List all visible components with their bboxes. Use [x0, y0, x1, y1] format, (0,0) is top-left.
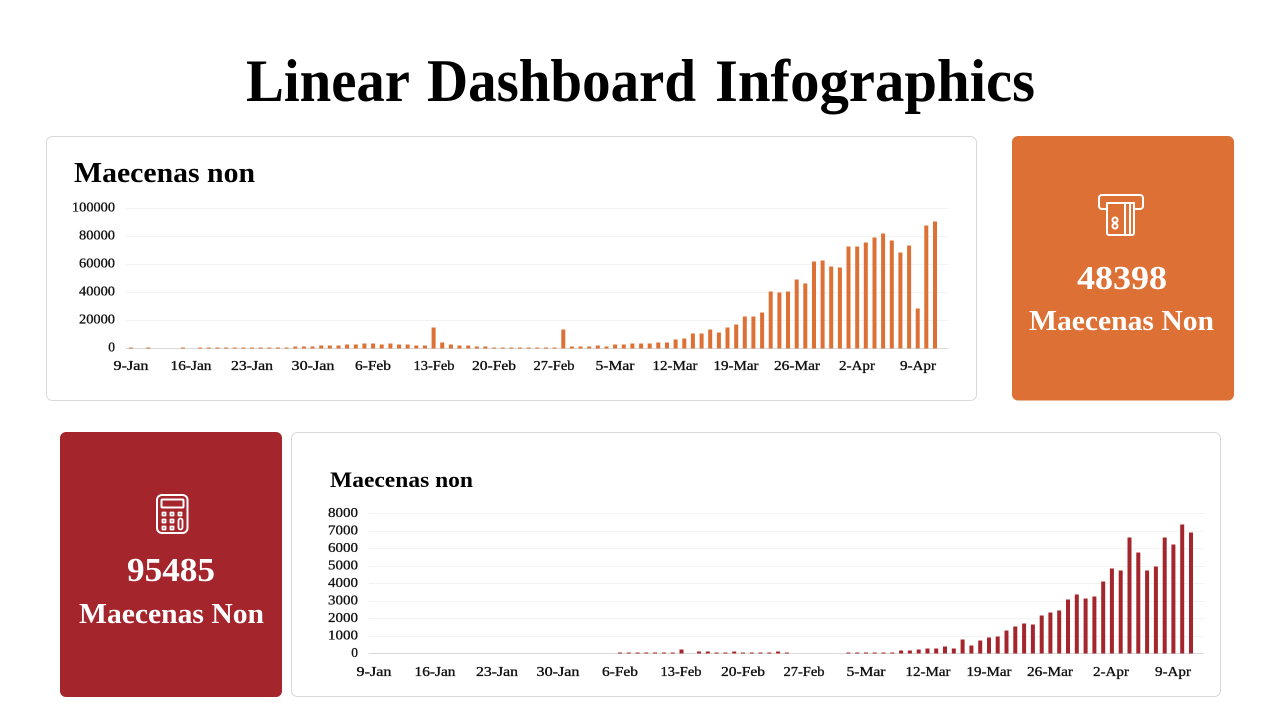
y axis labels: bottom chart: 1000 — [328, 628, 358, 642]
y axis labels: bottom chart — [328, 505, 358, 660]
x axis labels: top chart: 12-Mar — [652, 358, 698, 373]
x axis labels: bottom chart: 20-Feb — [721, 664, 765, 679]
x axis labels: bottom chart: 23-Jan — [476, 664, 518, 679]
panel: top chart — [46, 136, 976, 400]
y axis labels: top chart: 80000 — [79, 228, 115, 242]
y axis labels: bottom chart: 3000 — [328, 592, 358, 608]
y axis labels: bottom chart: 6000 — [328, 540, 358, 555]
y axis labels: bottom chart: 0 — [351, 645, 358, 660]
y axis labels: bottom chart: 5000 — [328, 558, 358, 572]
y axis labels: top chart: 0 — [108, 340, 115, 354]
bar series: bottom chart — [618, 524, 1193, 654]
icon: calculator — [157, 495, 188, 533]
x axis labels: bottom chart: 9-Apr — [1155, 664, 1192, 679]
y axis labels: top chart: 100000 — [72, 200, 115, 214]
x axis labels: top chart: 26-Mar — [774, 358, 821, 373]
y axis labels: bottom chart: 4000 — [328, 575, 358, 590]
x axis labels: bottom chart: 6-Feb — [602, 664, 638, 679]
title: Linear — [246, 48, 410, 114]
x axis labels: top chart: 9-Apr — [900, 358, 937, 373]
panel: orange stat card — [1012, 136, 1234, 400]
y axis labels: top chart: 40000 — [79, 284, 115, 298]
stat value: red card: 95485 — [127, 552, 215, 589]
stat label: orange card: Maecenas Non — [1029, 306, 1214, 337]
x axis labels: bottom chart: 5-Mar — [846, 664, 886, 679]
x axis labels: top chart: 27-Feb — [534, 358, 575, 373]
x axis labels: bottom chart: 2-Apr — [1093, 664, 1130, 679]
chart heading: bottom: Maecenas non — [330, 467, 473, 492]
x axis labels: bottom chart: 27-Feb — [784, 664, 825, 679]
x axis labels: top chart: 6-Feb — [355, 358, 391, 373]
y axis labels: top chart: 60000 — [79, 256, 115, 270]
icon: card in ATM slot — [1099, 195, 1143, 235]
x axis labels: bottom chart — [356, 664, 1192, 679]
x axis labels: bottom chart: 26-Mar — [1027, 664, 1074, 679]
x axis labels: top chart: 13-Feb — [414, 358, 455, 373]
y axis labels: bottom chart: 7000 — [328, 522, 358, 538]
x axis labels: top chart: 19-Mar — [714, 358, 759, 373]
x axis labels: bottom chart: 19-Mar — [966, 664, 1012, 679]
title — [246, 48, 1035, 114]
stat value: orange card: 48398 — [1077, 260, 1167, 297]
chart heading: top: Maecenas non — [74, 158, 255, 189]
y axis labels: top chart: 20000 — [79, 312, 115, 326]
x axis labels: bottom chart: 16-Jan — [414, 664, 456, 679]
title: Dashboard — [427, 48, 696, 114]
y axis labels: bottom chart: 2000 — [328, 610, 358, 625]
x axis labels: top chart: 16-Jan — [170, 358, 212, 373]
bar series: top chart — [129, 222, 937, 348]
x axis labels: top chart: 30-Jan — [292, 358, 335, 373]
x axis labels: top chart: 20-Feb — [472, 358, 516, 373]
x axis labels: bottom chart: 30-Jan — [536, 664, 580, 679]
x axis labels: bottom chart: 13-Feb — [660, 664, 702, 679]
panel: bottom chart — [292, 432, 1220, 696]
x axis labels: bottom chart: 9-Jan — [356, 664, 392, 679]
x axis labels: top chart: 9-Jan — [114, 358, 149, 373]
y axis labels: bottom chart: 8000 — [328, 505, 358, 520]
title: Infographics — [715, 48, 1035, 114]
y axis labels: top chart — [72, 200, 115, 354]
panel: red stat card — [60, 432, 282, 697]
x axis labels: bottom chart: 12-Mar — [906, 664, 951, 679]
x axis labels: top chart: 23-Jan — [231, 358, 273, 373]
x axis labels: top chart — [114, 358, 937, 373]
stat label: red card: Maecenas Non — [79, 599, 264, 630]
x axis labels: top chart: 2-Apr — [839, 358, 876, 373]
x axis labels: top chart: 5-Mar — [596, 358, 635, 373]
